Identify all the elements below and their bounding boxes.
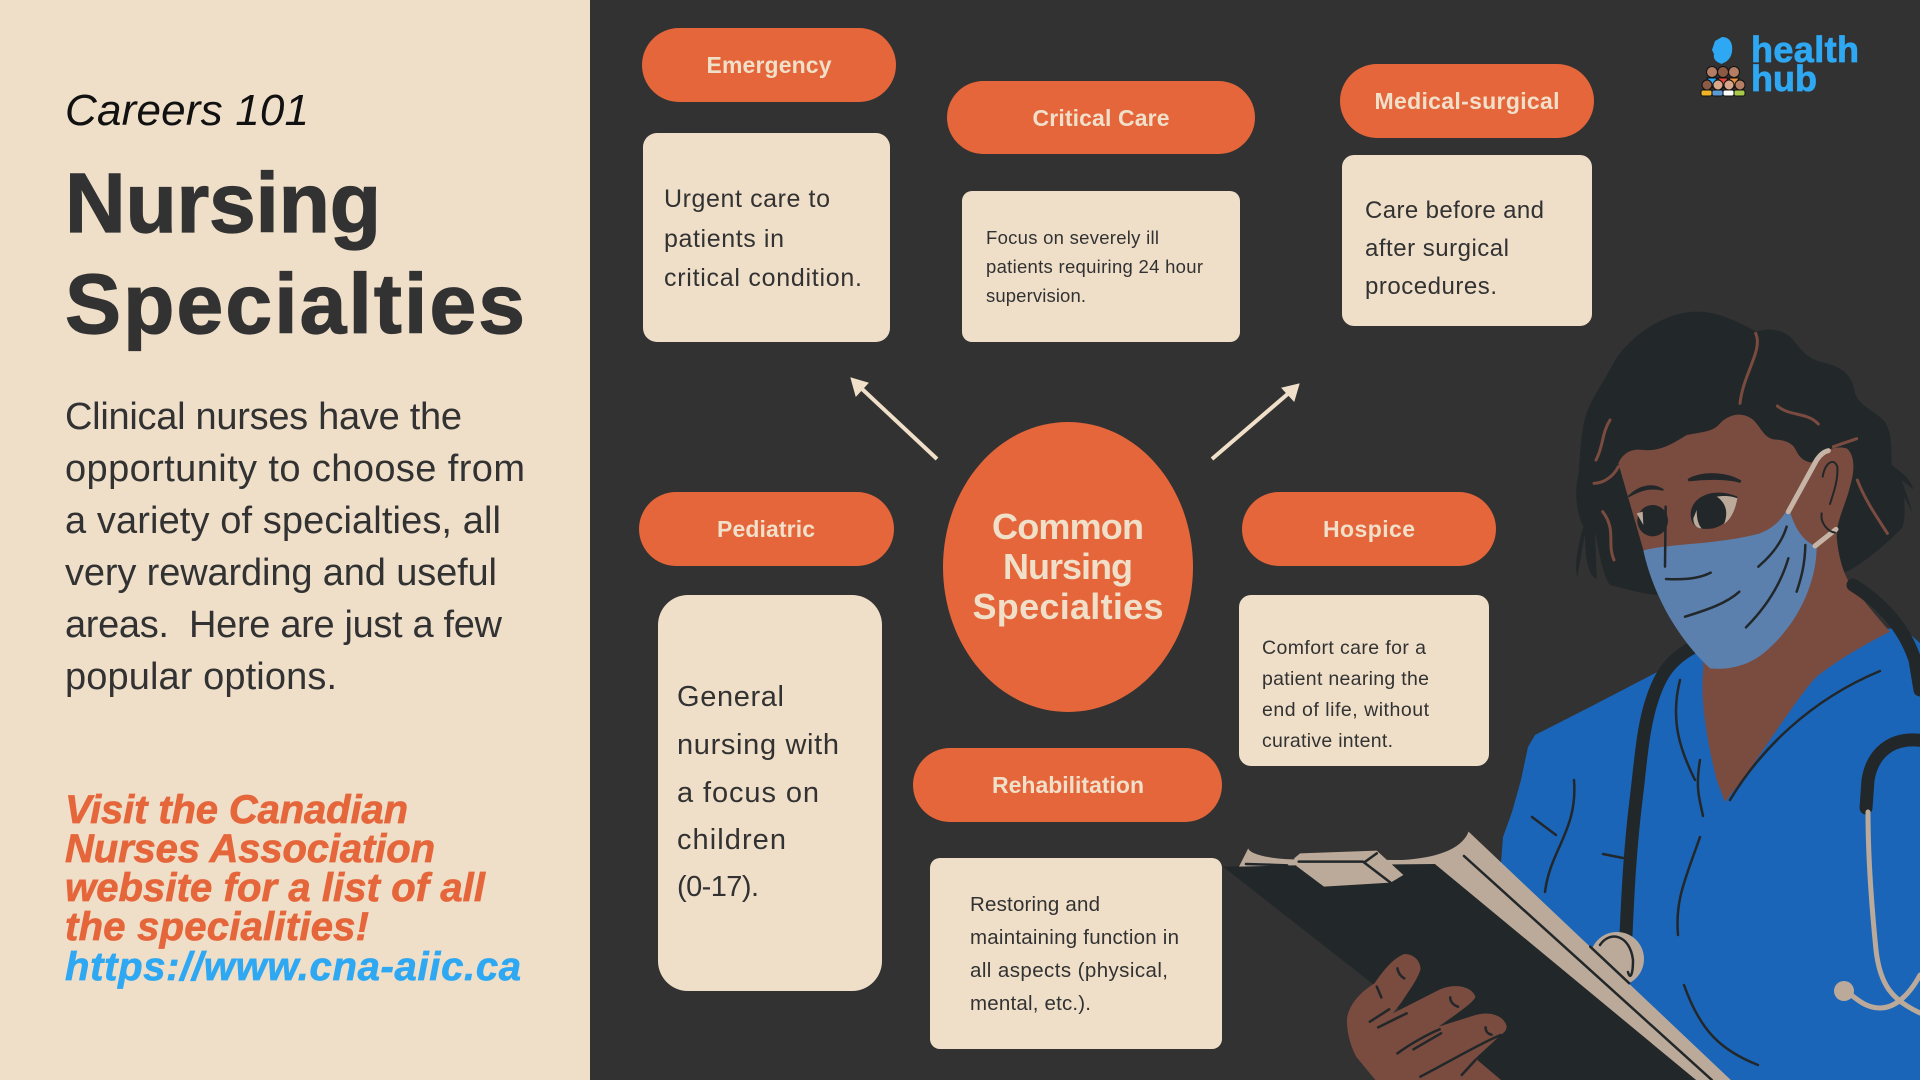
box: Emergency description (643, 133, 890, 342)
box: Rehabilitation description (930, 858, 1222, 1049)
scrub fold lines (1532, 671, 1880, 1065)
box: Pediatric description: General (677, 681, 784, 713)
intro paragraph: very rewarding and useful (65, 552, 497, 594)
scrubs (1501, 628, 1920, 1080)
intro paragraph: opportunity to choose from (65, 448, 525, 490)
pill: Emergency: Emergency (706, 52, 832, 78)
hair highlights (1594, 333, 1887, 560)
logo icon: people (1701, 66, 1745, 96)
central node: Common Nursing Specialties: Nursing (1003, 546, 1133, 587)
intro paragraph: a variety of specialties, all (65, 500, 501, 542)
clipboard (1223, 832, 1733, 1080)
intro paragraph: popular options. (65, 656, 337, 698)
pill: Medical-surgical (1340, 64, 1594, 138)
central node: Common Nursing Specialties (943, 422, 1193, 712)
box: Rehabilitation description: maintaining function in (970, 926, 1179, 949)
card: Medical-surgical (1340, 64, 1594, 326)
pill: Critical Care (947, 81, 1255, 154)
stethoscope head over clipboard edge (1600, 937, 1633, 976)
box: Medical-surgical description: procedures. (1365, 273, 1497, 300)
pill: Emergency (642, 28, 896, 102)
pill: Pediatric (639, 492, 894, 566)
pill: Hospice (1242, 492, 1496, 566)
card: Rehabilitation (913, 748, 1222, 1049)
logo wordmark (1751, 29, 1859, 99)
box: Rehabilitation description: Restoring and (970, 893, 1100, 916)
call to action: website for a list of all (65, 866, 486, 910)
call to action: Visit the Canadian (65, 788, 408, 832)
pill: Critical Care: Critical Care (1032, 105, 1170, 131)
arrow: up-right (1212, 384, 1299, 459)
box: Pediatric description (658, 595, 882, 991)
box: Emergency description: Urgent care to (664, 185, 830, 213)
mask creases (1665, 507, 1805, 627)
box: Medical-surgical description: Care before and (1365, 197, 1544, 224)
box: Hospice description: patient nearing the (1262, 668, 1429, 690)
intro paragraph: areas. Here are just a few (65, 604, 503, 646)
box: Pediatric description: a focus on (677, 777, 819, 809)
mask ear straps (1788, 451, 1836, 546)
title: Specialties (65, 257, 525, 351)
box: Rehabilitation description: mental, etc.). (970, 992, 1091, 1015)
box: Critical Care description (962, 191, 1240, 342)
box: Medical-surgical description (1342, 155, 1592, 326)
box: Critical Care description: supervision. (986, 285, 1086, 306)
intro paragraph: Clinical nurses have the (65, 396, 462, 438)
box: Pediatric description: (0-17). (677, 871, 759, 903)
hair (1576, 312, 1913, 595)
box: Medical-surgical description: after surgical (1365, 235, 1509, 262)
intro paragraph (65, 396, 525, 698)
central node: Common Nursing Specialties: Common (992, 506, 1144, 547)
card: Hospice (1239, 492, 1496, 766)
card: Critical Care (947, 81, 1255, 342)
eyes and brows (1628, 475, 1741, 536)
box: Rehabilitation description: all aspects (physical, (970, 959, 1168, 982)
box: Pediatric description: nursing with (677, 729, 839, 761)
logo wordmark: hub (1751, 58, 1817, 99)
central node: Common Nursing Specialties: Specialties (972, 586, 1164, 627)
title: Nursing (65, 156, 381, 250)
stethoscope chest piece (1590, 932, 1854, 1001)
pill: Pediatric: Pediatric (717, 516, 815, 542)
ear lines (1821, 462, 1837, 533)
box: Critical Care description: patients requiring 24 hour (986, 256, 1203, 277)
face and neck (1618, 415, 1890, 802)
box: Critical Care description: Focus on severely ill (986, 227, 1159, 248)
call to action: Nurses Association (65, 827, 435, 871)
box: Hospice description: Comfort care for a (1262, 637, 1426, 659)
call to action (65, 788, 521, 989)
arrow: up-left (851, 378, 937, 459)
mask (1594, 333, 1887, 669)
illustration: nurse with clipboard (1223, 312, 1920, 1080)
card: Pediatric (639, 492, 894, 991)
title (65, 156, 525, 351)
eyebrow: Careers 101: Careers 101 (65, 86, 309, 135)
box: Emergency description: critical condition. (664, 264, 862, 292)
hand (1347, 954, 1507, 1080)
box: Hospice description: curative intent. (1262, 730, 1393, 752)
call to action: the specialities! (65, 905, 369, 949)
panel: left intro (0, 0, 590, 1080)
box: Emergency description: patients in (664, 225, 784, 253)
logo icon: head (1712, 37, 1732, 64)
box: Hospice description (1239, 595, 1489, 766)
card: Emergency (642, 28, 896, 342)
box: Pediatric description: children (677, 824, 786, 856)
stethoscope tubes (1626, 585, 1920, 1013)
pill: Medical-surgical: Medical-surgical (1374, 88, 1560, 114)
call to action: https://www.cna-aiic.ca (65, 945, 521, 989)
pill: Hospice: Hospice (1323, 516, 1415, 542)
logo wordmark: health (1751, 29, 1859, 70)
pill: Rehabilitation (913, 748, 1222, 822)
box: Hospice description: end of life, without (1262, 699, 1430, 721)
pill: Rehabilitation: Rehabilitation (992, 772, 1144, 798)
logo: health hub (1701, 29, 1859, 99)
